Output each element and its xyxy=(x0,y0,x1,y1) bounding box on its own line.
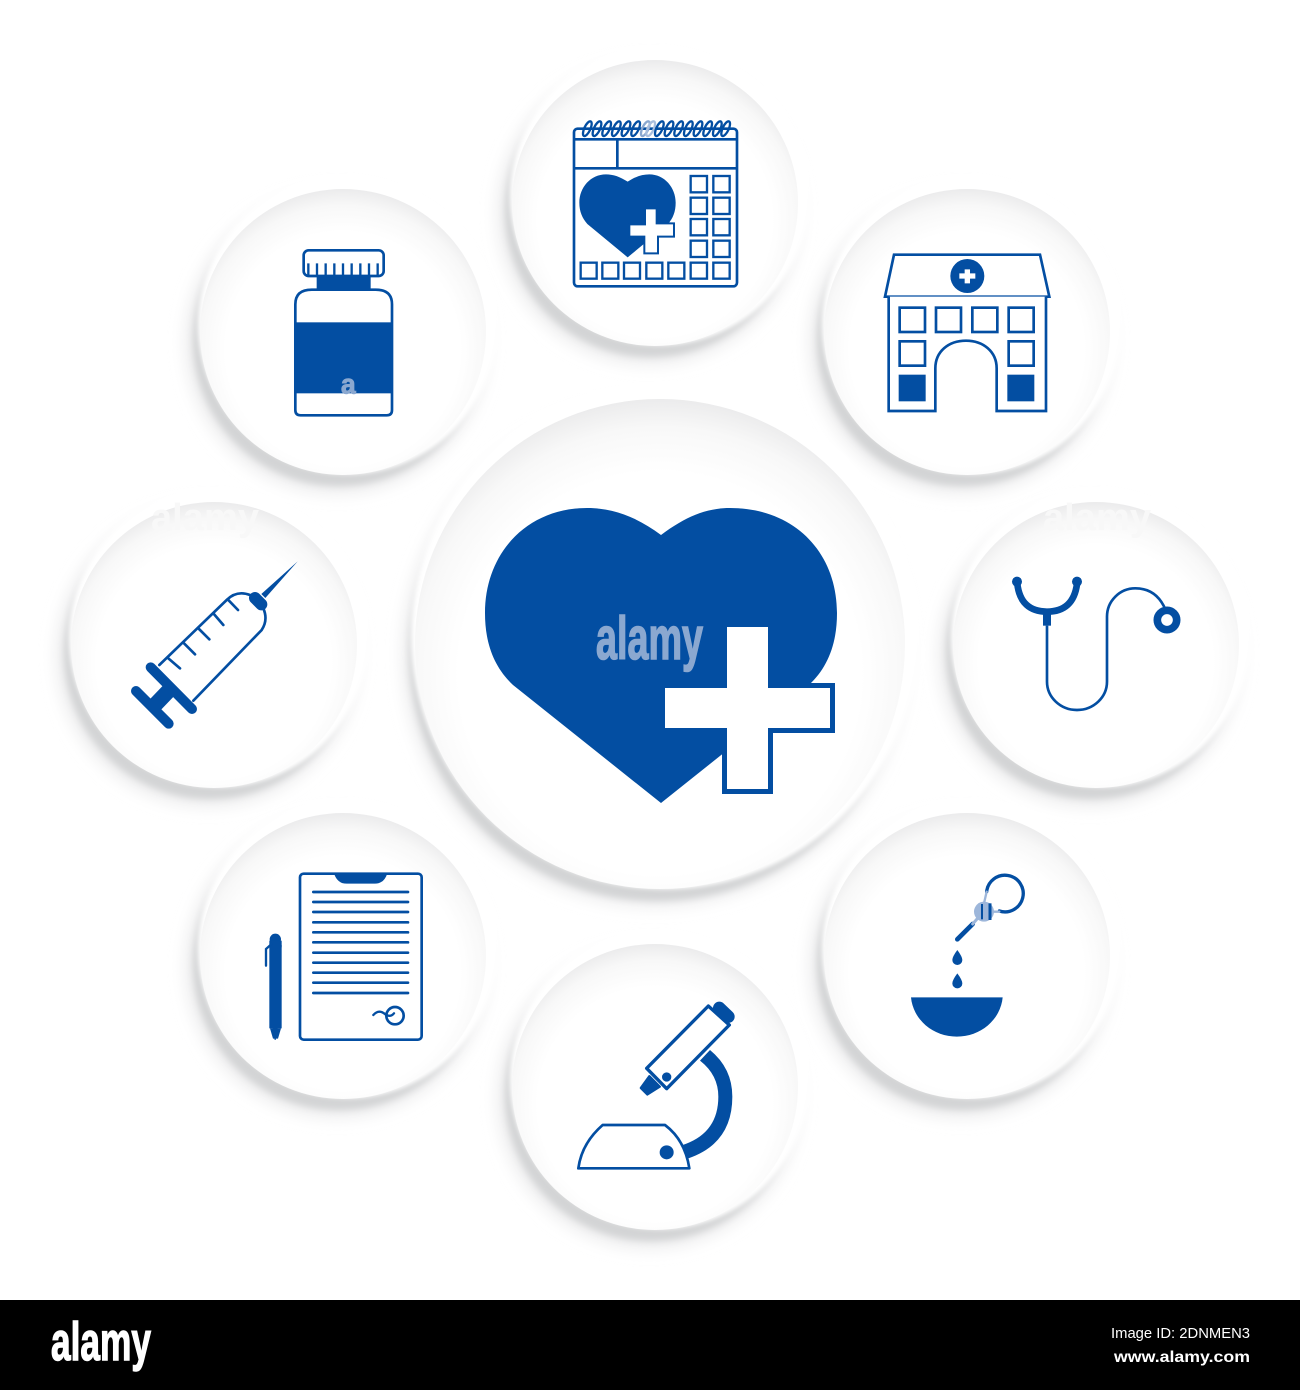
panel: stethoscope disc xyxy=(939,487,1251,806)
watermark: faint text above stethoscope: alamy xyxy=(1043,497,1151,539)
icon: dropper and bowl xyxy=(911,875,1023,1037)
footer bar xyxy=(0,1300,1300,1390)
panel: calendar disc xyxy=(498,45,810,364)
panel: syringe disc xyxy=(57,487,369,806)
panel: microscope disc xyxy=(498,929,810,1248)
watermark: central: alamy xyxy=(596,605,703,672)
panel: hospital disc xyxy=(810,174,1122,493)
icon: syringe xyxy=(136,561,298,724)
image id: Image ID: 2DNMEN3 xyxy=(1111,1325,1250,1342)
icon: calendar with heart xyxy=(574,120,737,286)
icon: microscope xyxy=(578,1006,732,1168)
watermark: faint text above syringe: alamy xyxy=(151,497,259,539)
panel: central disc xyxy=(403,381,919,906)
icon: medicine bottle xyxy=(295,250,392,415)
panel: clipboard disc xyxy=(186,798,498,1117)
icon: clipboard and pen xyxy=(266,873,422,1040)
icon: hospital building xyxy=(885,255,1049,411)
panel: dropper disc xyxy=(810,798,1122,1117)
icon: large heart with cross xyxy=(485,508,837,803)
watermark: bottle letter: a xyxy=(341,369,356,400)
footer logo: alamy xyxy=(51,1312,151,1372)
website: www.alamy.com xyxy=(1113,1349,1250,1366)
panel: medicine bottle disc xyxy=(186,174,498,493)
icon: stethoscope xyxy=(1012,577,1177,710)
